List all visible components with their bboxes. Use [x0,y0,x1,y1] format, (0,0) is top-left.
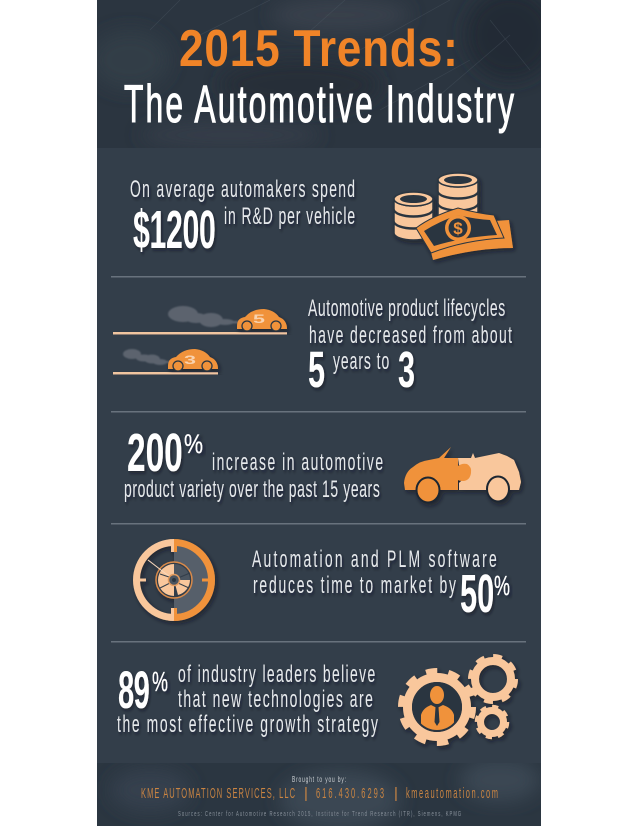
R&D text [130,176,355,260]
icon: puzzle car [404,447,521,502]
panel: product lifecycles [113,295,512,398]
footer company contact line: KME AUTOMATION SERVICES, LLC [141,784,295,802]
infographic canvas [97,0,541,826]
growth text: 89 [118,661,150,720]
R&D text: in R&D per vehicle [224,203,355,230]
background panel [97,0,541,826]
icon: coins and banknotes [394,173,513,260]
title: 2015 Trends: [179,20,458,78]
lifecycle text: Automotive product lifecycles [308,295,505,322]
time to market text: 50 [460,564,494,624]
panel: product variety [124,422,521,503]
panel: R&D spend [130,173,513,260]
variety text: increase in automotive [212,449,383,476]
icon: coins and banknotes: $ [453,219,463,238]
growth text: of industry leaders believe [178,661,375,688]
variety text [124,422,383,503]
panel: growth strategy [117,656,516,742]
variety text: % [184,429,203,459]
footer credit: Brought to you by: [292,776,346,784]
time to market text: Automation and PLM software [252,546,497,573]
footer company contact line: 616.430.6293 [316,784,384,802]
lifecycle text: have decreased from about [309,322,512,349]
growth text: that new technologies are [178,686,373,713]
time to market text: % [494,570,510,601]
time to market text [252,546,510,624]
variety text: product variety over the past 15 years [124,476,380,503]
lifecycle text [308,295,512,398]
variety text: 200 [127,422,183,483]
growth text: the most effective growth strategy [117,711,378,738]
panel: time to market [135,539,510,624]
footer company contact line [141,784,498,802]
icon: gauge with disc [135,539,215,621]
growth text [117,661,378,738]
footer sources: Sources: Center for Automotive Research 2015, Institute for Trend Research (ITR), Siemens, KPMG [178,811,462,818]
title: The Automotive Industry [124,75,514,134]
footer company contact line: | [394,785,398,802]
R&D text: On average automakers spend [130,176,355,203]
lifecycle text: 3 [398,341,415,398]
footer company contact line: kmeautomation.com [406,784,498,802]
icon: car labelled 5 with smoke: 5 [253,312,266,326]
icon: car labelled 5 with smoke [113,306,287,334]
icon: car labelled 3 with smoke: 3 [184,353,197,367]
time to market text: reduces time to market by [253,572,456,599]
lifecycle text: years to [333,348,389,375]
header band [90,0,555,149]
title [124,20,514,134]
icon: car labelled 3 with smoke [113,349,218,374]
footer company contact line: | [304,785,308,802]
footer band [97,758,541,826]
R&D text: $1200 [133,200,216,260]
lifecycle text: 5 [308,341,325,398]
icon: gears with person [402,656,516,742]
growth text: % [152,666,168,697]
